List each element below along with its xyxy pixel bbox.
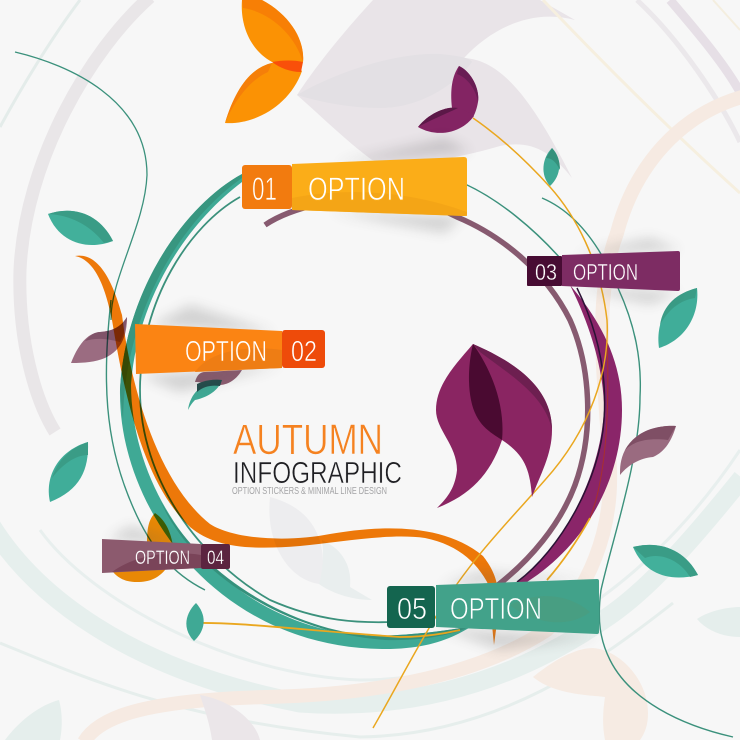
icon: mauve leaf right bbox=[620, 426, 676, 475]
icon: teal leaf right bbox=[658, 288, 697, 348]
orange swoosh tail bbox=[491, 615, 498, 645]
sticker shadows bbox=[108, 138, 680, 650]
yellow lower line bbox=[195, 518, 590, 637]
icon: teal leaf lower left bbox=[49, 442, 88, 502]
number 03: 03 bbox=[535, 259, 557, 285]
number 01: 01 bbox=[252, 171, 277, 207]
icon: mauve leaf left bbox=[71, 317, 127, 363]
sticker: option 05 bbox=[387, 579, 599, 634]
mauve ring bbox=[265, 198, 588, 585]
sticker: option 04 bbox=[102, 539, 230, 573]
label OPTION: OPTION bbox=[450, 591, 542, 626]
number 04: 04 bbox=[207, 548, 224, 569]
icon: orange leaf behind option 04 bbox=[113, 513, 173, 582]
sticker: option 02 bbox=[135, 324, 325, 374]
yellow thin line bbox=[373, 118, 607, 728]
outer thin teal ring right, upper part bbox=[465, 184, 560, 258]
stem: long thin teal line left bbox=[15, 52, 147, 320]
thick teal ring bbox=[120, 174, 472, 649]
icon: leaves under option 02 bbox=[188, 370, 242, 410]
label OPTION: OPTION bbox=[185, 336, 267, 368]
number 02: 02 bbox=[291, 336, 317, 368]
icon: teal leaf small top bbox=[543, 148, 560, 186]
icon: teal leaf lower right bbox=[633, 545, 698, 578]
red thin line on crescent bbox=[590, 340, 608, 518]
label OPTION: OPTION bbox=[308, 171, 405, 207]
sticker: option 03 bbox=[527, 251, 680, 291]
purple crescent bbox=[517, 285, 622, 582]
icon: orange butterfly leaves bbox=[225, 0, 303, 123]
title line: AUTUMN: AUTUMN bbox=[233, 416, 383, 464]
icon: teal leaf upper left bbox=[48, 211, 113, 245]
label OPTION: OPTION bbox=[135, 548, 190, 569]
subtitle: OPTION STICKERS & MINIMAL LINE DESIGN bbox=[232, 486, 387, 497]
dark thin line on crescent bbox=[517, 288, 605, 582]
icon: large purple leaves bbox=[436, 344, 552, 508]
sticker: option 01 bbox=[242, 157, 467, 216]
orange swoosh bbox=[75, 256, 498, 590]
title line: INFOGRAPHIC: INFOGRAPHIC bbox=[233, 455, 402, 490]
outer thin teal ring left bbox=[106, 300, 205, 590]
icon: purple butterfly leaves bbox=[418, 66, 478, 133]
title bbox=[232, 416, 402, 497]
label OPTION: OPTION bbox=[573, 259, 638, 285]
thin teal ring bbox=[140, 197, 392, 622]
icon: teal leaf small bottom bbox=[186, 603, 204, 641]
long thin teal line right bbox=[542, 198, 733, 737]
number 05: 05 bbox=[397, 591, 427, 626]
